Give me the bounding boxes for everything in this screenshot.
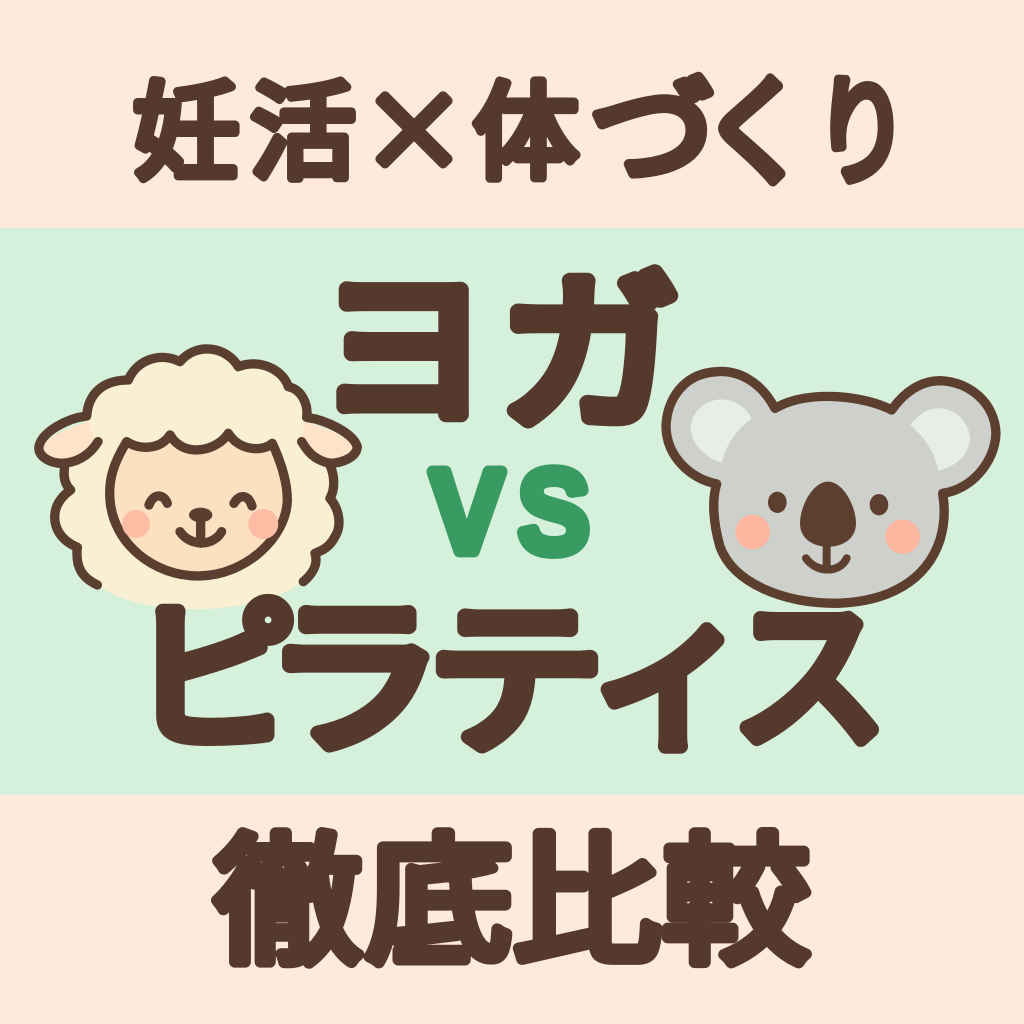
vs label	[432, 416, 589, 583]
heading: ヨガ: ガ	[499, 259, 680, 451]
koala nose	[800, 482, 856, 547]
footer title: 徹底比較	[214, 823, 810, 981]
koala eyes	[768, 492, 787, 513]
heading: ヨガ	[318, 255, 680, 451]
title: 妊活×体づくり	[133, 47, 909, 201]
title: 妊活×体づくり: く	[700, 68, 811, 200]
footer title: 徹底比較: 底	[365, 823, 513, 981]
heading: ピラティス: ス	[731, 586, 888, 771]
icon: koala	[666, 371, 996, 603]
title: 妊活×体づくり: 活	[250, 75, 356, 193]
heading: ピラティス: テ	[427, 590, 605, 774]
sheep face	[110, 433, 287, 576]
title: 妊活×体づくり: り	[814, 67, 909, 199]
footer title: 徹底比較: 徹	[214, 823, 362, 981]
heading: ピラティス: ィ	[588, 582, 753, 769]
koala cheeks	[735, 515, 770, 549]
footer title: 徹底比較: 比	[513, 823, 661, 981]
koala inner ears	[691, 399, 970, 471]
top band	[0, 0, 1024, 228]
koala mouth	[806, 545, 847, 570]
sheep outline	[39, 349, 357, 585]
middle green panel	[0, 228, 1024, 795]
heading: ヨガ: ヨ	[318, 255, 490, 447]
title: 妊活×体づくり: ×	[361, 47, 467, 201]
bottom band	[0, 795, 1024, 1024]
sheep nose	[189, 508, 212, 522]
heading: ピラティス: ラ	[265, 586, 443, 774]
koala head	[666, 371, 996, 603]
title: 妊活×体づくり: 妊	[133, 75, 239, 193]
sheep ear fills	[42, 422, 355, 460]
footer title: 徹底比較: 較	[662, 823, 810, 981]
title: 妊活×体づくり: 体	[473, 75, 579, 193]
icon: sheep	[39, 349, 357, 609]
title: 妊活×体づくり: づ	[590, 68, 715, 198]
heading: ピラティス: ピ	[132, 586, 297, 770]
heading: ピラティス	[132, 582, 888, 774]
sheep wool	[55, 349, 339, 609]
vs label: v	[432, 416, 502, 583]
sheep cheeks	[122, 510, 150, 538]
vs label: s	[519, 416, 589, 583]
